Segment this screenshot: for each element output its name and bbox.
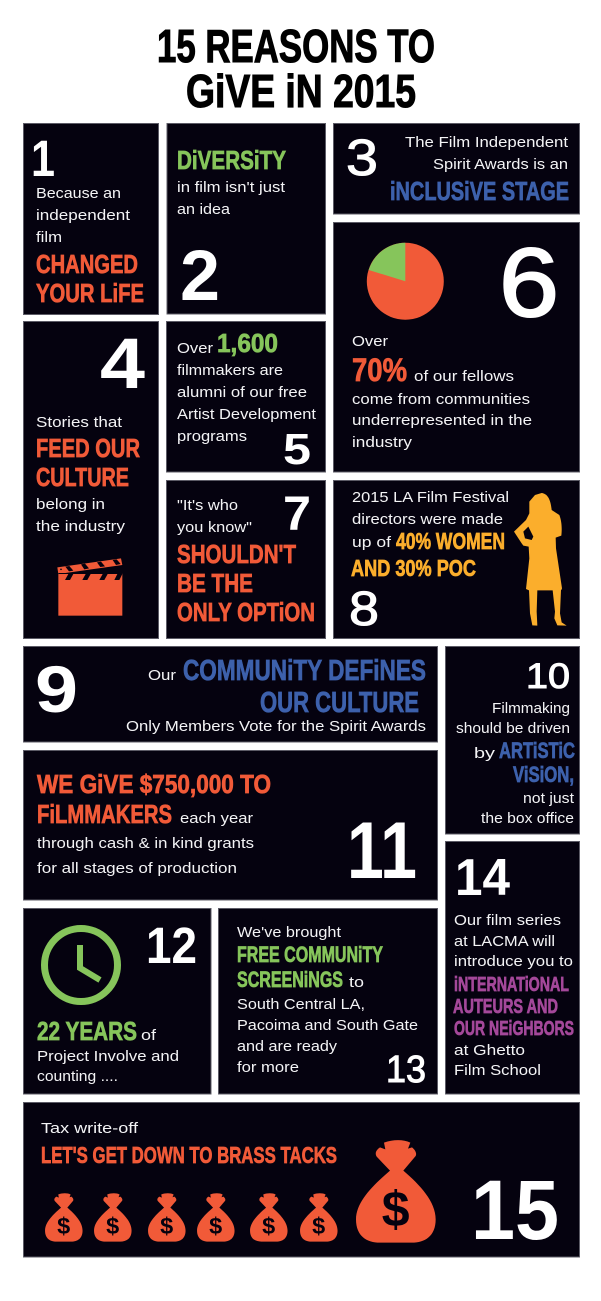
body text 4: belong in bbox=[36, 496, 105, 513]
body text 13: and are ready bbox=[237, 1038, 338, 1055]
body text 9: Our bbox=[148, 667, 176, 684]
heading: changed your life: YOUR LiFE bbox=[36, 278, 144, 308]
body text 2: an idea bbox=[177, 201, 231, 218]
body text 10: not just bbox=[523, 790, 575, 807]
icon: money bag 1 bbox=[45, 1193, 83, 1242]
number 6: 6 bbox=[499, 228, 559, 337]
body text 6: 70% bbox=[352, 352, 407, 388]
body text 13: We've brought bbox=[237, 924, 342, 941]
body text 1: film bbox=[36, 229, 62, 246]
body text 10: should be driven bbox=[456, 720, 570, 737]
icon: large money bag bbox=[356, 1140, 436, 1243]
number 2: 2 bbox=[180, 237, 220, 316]
body text 12: counting .... bbox=[37, 1068, 118, 1085]
number 12: 12 bbox=[146, 917, 197, 974]
panel 11: we give $750,000 bbox=[24, 750, 438, 900]
heading: shouldn't be the only option bbox=[177, 539, 315, 627]
title bbox=[157, 20, 435, 117]
body text 12 bbox=[37, 1027, 179, 1085]
icon: money bag 4: $ bbox=[209, 1213, 222, 1239]
icon: money bag 1: $ bbox=[57, 1213, 70, 1239]
body text 10: Filmmaking bbox=[492, 700, 570, 717]
icon: money bag 6: $ bbox=[312, 1213, 325, 1239]
body text 10: the box office bbox=[481, 810, 574, 827]
body text 2 bbox=[177, 179, 286, 218]
heading: shouldn't be the only option: BE THE bbox=[177, 568, 253, 598]
body text 8: 2015 LA Film Festival bbox=[352, 489, 509, 506]
body text 13: to bbox=[349, 974, 364, 991]
heading: 40% women and 30% poc: AND 30% POC bbox=[351, 555, 476, 581]
body text 9 bbox=[126, 667, 426, 735]
body text 3 bbox=[405, 134, 569, 173]
number 10: 10 bbox=[526, 657, 570, 696]
body text 6: industry bbox=[352, 434, 413, 451]
body text 6: come from communities bbox=[352, 391, 530, 408]
heading: artistic vision: ViSiON, bbox=[513, 762, 574, 787]
body text 1: independent bbox=[36, 207, 131, 224]
body text 4 bbox=[36, 414, 126, 535]
heading: free community screenings bbox=[237, 942, 383, 992]
body text 3: Spirit Awards is an bbox=[433, 156, 568, 173]
body text 14: at Ghetto bbox=[454, 1042, 525, 1059]
icon: large money bag: $ bbox=[382, 1182, 410, 1238]
number 4: 4 bbox=[100, 325, 146, 404]
heading: international auteurs and our neighbors bbox=[453, 973, 574, 1040]
panel 7: who you know bbox=[166, 480, 326, 638]
panel 1: changed your life bbox=[24, 124, 158, 314]
icon: woman silhouette bbox=[514, 493, 567, 626]
body text 8: up of bbox=[352, 534, 392, 551]
body text 5: 1,600 bbox=[217, 328, 278, 358]
body text 9: Only Members Vote for the Spirit Awards bbox=[126, 718, 426, 735]
heading: community defines our culture: COMMUNiTY DEFiNES bbox=[183, 655, 426, 687]
body text 5: alumni of our free bbox=[177, 384, 307, 401]
heading: feed our culture: FEED OUR bbox=[36, 433, 140, 463]
body text 15: Tax write-off bbox=[41, 1120, 139, 1137]
body text 14: at LACMA will bbox=[454, 933, 555, 950]
body text 13: for more bbox=[237, 1059, 299, 1076]
panel 3: inclusive stage bbox=[334, 124, 580, 214]
icon: money bag 6 bbox=[300, 1193, 338, 1242]
body text 6: of our fellows bbox=[414, 368, 514, 385]
body text 12: Project Involve and bbox=[37, 1048, 179, 1065]
heading: shouldn't be the only option: SHOULDN'T bbox=[177, 539, 296, 569]
body text 11: each year bbox=[180, 810, 253, 827]
body text 14: Film School bbox=[454, 1062, 541, 1079]
heading: artistic vision bbox=[499, 738, 575, 787]
heading: 40% women and 30% poc bbox=[351, 528, 505, 581]
body text 4: the industry bbox=[36, 518, 126, 535]
panel 4: feed our culture bbox=[24, 322, 158, 638]
number 5: 5 bbox=[283, 425, 311, 474]
body text 10 bbox=[456, 700, 575, 827]
body text 14 bbox=[454, 912, 573, 1079]
title: 15 REASONS TO bbox=[157, 20, 435, 72]
heading: we give $750,000 to filmmakers: FiLMMAKERS bbox=[37, 799, 172, 829]
body text 4: Stories that bbox=[36, 414, 123, 431]
icon: money bag 2 bbox=[94, 1193, 132, 1242]
number 3: 3 bbox=[346, 129, 378, 186]
icon: money bag 2: $ bbox=[106, 1213, 119, 1239]
heading: we give $750,000 to filmmakers bbox=[37, 769, 271, 829]
heading: changed your life bbox=[36, 249, 144, 308]
body text 6: Over bbox=[352, 333, 388, 350]
number 9: 9 bbox=[35, 652, 78, 726]
panel 9: community defines our culture bbox=[24, 646, 438, 742]
body text 2: in film isn't just bbox=[177, 179, 286, 196]
panel 14: film series at lacma bbox=[446, 842, 580, 1094]
icon: clock bbox=[44, 928, 118, 1002]
body text 6 bbox=[352, 333, 532, 451]
pie chart bbox=[367, 243, 444, 320]
icon: money bag 3 bbox=[148, 1193, 186, 1242]
body text 11: for all stages of production bbox=[37, 860, 237, 877]
body text 12: of bbox=[141, 1027, 157, 1044]
number 14: 14 bbox=[455, 849, 510, 907]
body text 6: underrepresented in the bbox=[352, 412, 532, 429]
number 13: 13 bbox=[386, 1049, 426, 1091]
icon: money bag 5: $ bbox=[262, 1213, 275, 1239]
icon: money bag 5 bbox=[250, 1193, 288, 1242]
heading: 22 years: 22 YEARS bbox=[37, 1016, 137, 1046]
body text 1 bbox=[36, 185, 131, 246]
panel 13: free community screenings bbox=[218, 908, 438, 1094]
number 7: 7 bbox=[283, 488, 311, 541]
panel 15: tax write-off bbox=[24, 1102, 580, 1257]
body text 5 bbox=[177, 328, 317, 445]
panel 12: 22 years bbox=[24, 908, 211, 1094]
title: GiVE iN 2015 bbox=[186, 65, 416, 117]
number 15: 15 bbox=[471, 1163, 559, 1257]
panel 5: alumni bbox=[166, 322, 326, 474]
body text 13: South Central LA, bbox=[237, 996, 365, 1013]
panel 2: diversity bbox=[167, 124, 326, 316]
panel 10: artistic vision bbox=[446, 646, 580, 834]
heading: changed your life: CHANGED bbox=[36, 249, 138, 279]
heading: free community screenings: SCREENiNGS bbox=[237, 967, 343, 992]
heading: community defines our culture bbox=[183, 655, 426, 719]
heading: diversity: DiVERSiTY bbox=[177, 145, 286, 175]
heading: let's get down to brass tacks: LET'S GET DOWN TO BRASS TACKS bbox=[41, 1142, 337, 1168]
body text 13 bbox=[237, 924, 418, 1076]
panel 6: seventy percent bbox=[334, 222, 580, 472]
body text 5: Over bbox=[177, 340, 213, 357]
body text 3: The Film Independent bbox=[405, 134, 569, 151]
icon: money bag 4 bbox=[197, 1193, 235, 1242]
icon: money bag 3: $ bbox=[160, 1213, 173, 1239]
heading: shouldn't be the only option: ONLY OPTiON bbox=[177, 597, 315, 627]
heading: international auteurs and our neighbors: AUTEURS AND bbox=[453, 995, 558, 1018]
body text 14: introduce you to bbox=[454, 953, 573, 970]
body text 7 bbox=[177, 497, 252, 536]
icon: clapperboard bbox=[57, 558, 122, 616]
number 8: 8 bbox=[349, 583, 379, 636]
heading: feed our culture bbox=[36, 433, 140, 492]
heading: we give $750,000 to filmmakers: WE GiVE $750,000 TO bbox=[37, 769, 271, 799]
body text 5: filmmakers are bbox=[177, 362, 283, 379]
body text 1: Because an bbox=[36, 185, 121, 202]
body text 11 bbox=[37, 810, 254, 877]
body text 8: directors were made bbox=[352, 511, 503, 528]
heading: 40% women and 30% poc: 40% WOMEN bbox=[396, 528, 505, 554]
body text 5: Artist Development bbox=[177, 406, 317, 423]
number 11: 11 bbox=[347, 806, 417, 896]
heading: artistic vision: ARTiSTiC bbox=[499, 738, 575, 763]
body text 13: Pacoima and South Gate bbox=[237, 1017, 418, 1034]
body text 14: Our film series bbox=[454, 912, 561, 929]
body text 10: by bbox=[474, 745, 496, 762]
heading: feed our culture: CULTURE bbox=[36, 462, 129, 492]
heading: free community screenings: FREE COMMUNiTY bbox=[237, 942, 383, 967]
heading: community defines our culture: OUR CULTURE bbox=[260, 687, 419, 719]
panel 8: la film festival directors bbox=[334, 480, 580, 638]
body text 7: "It's who bbox=[177, 497, 238, 514]
body text 5: programs bbox=[177, 428, 247, 445]
body text 8 bbox=[352, 489, 509, 551]
body text 11: through cash & in kind grants bbox=[37, 835, 254, 852]
body text 7: you know" bbox=[177, 519, 252, 536]
number 1: 1 bbox=[31, 130, 55, 187]
